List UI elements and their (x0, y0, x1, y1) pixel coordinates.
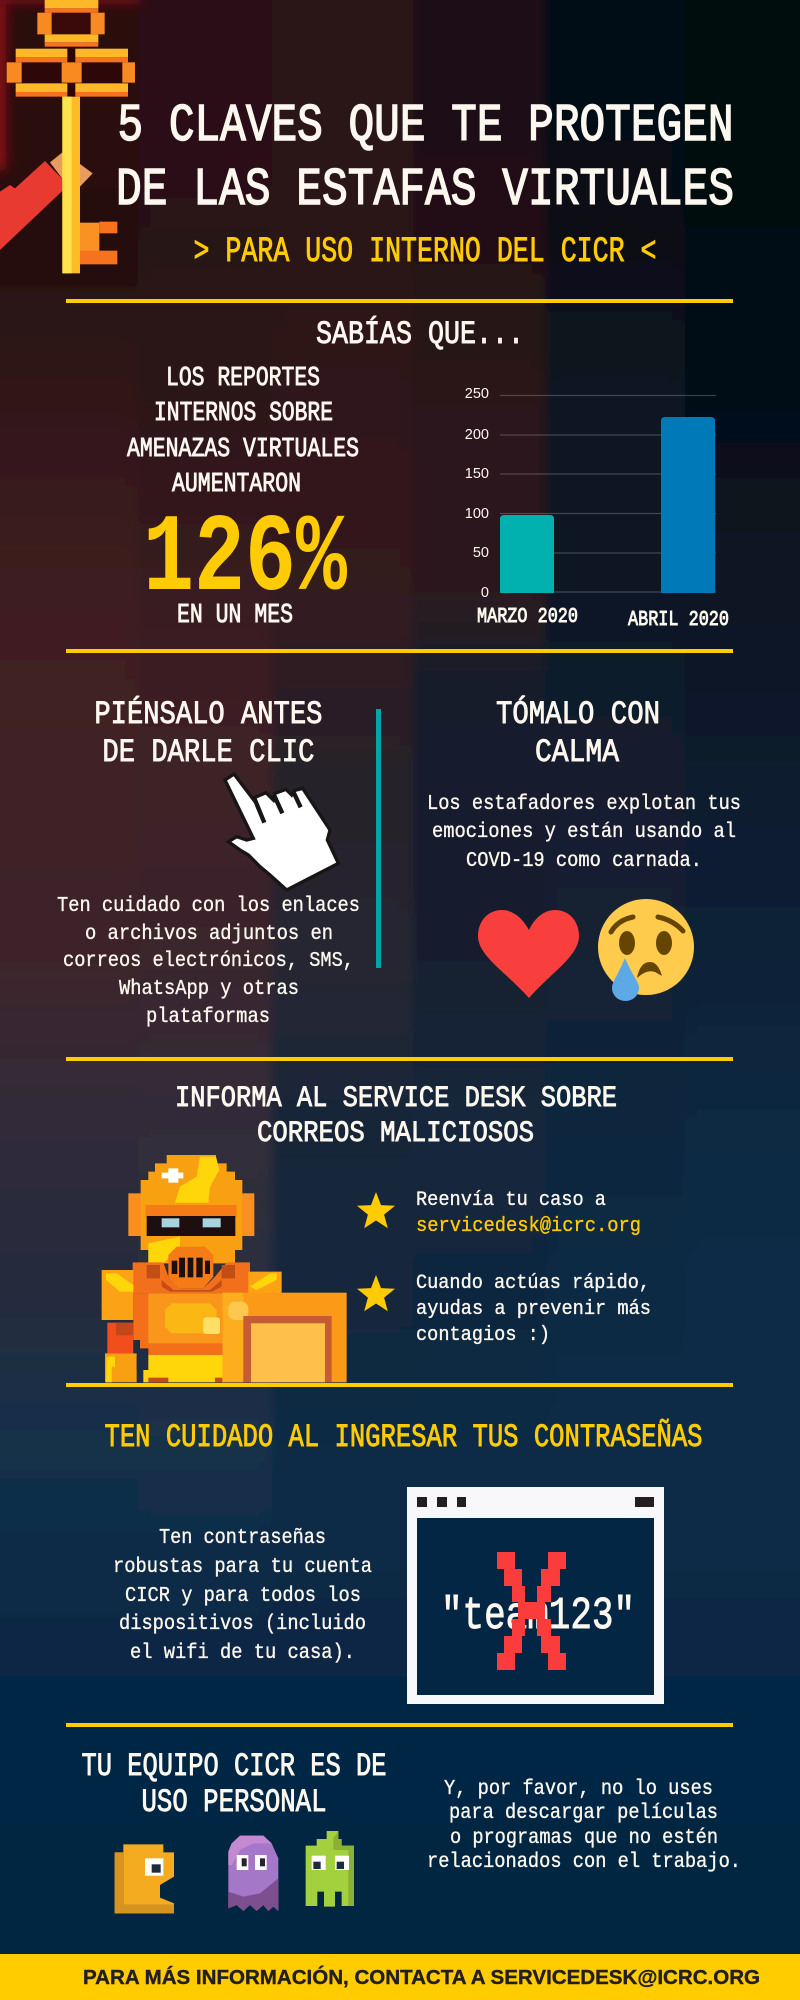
body text (427, 793, 741, 873)
key shaft (62, 97, 80, 273)
illustration: browser window with crossed password: "team123" (441, 1591, 635, 1642)
body text: plataformas (146, 1006, 270, 1029)
footer bar: PARA MÁS INFORMACIÓN, CONTACTA A SERVICEDESK@ICRC.ORG (83, 1965, 760, 1989)
list item: actúa rápido: Cuando actúas rápido, (416, 1272, 650, 1295)
body text: Y, por favor, no lo uses (444, 1778, 713, 1801)
subtitle: > PARA USO INTERNO DEL CICR < (194, 232, 656, 272)
title (116, 96, 734, 220)
body text: relacionados con el trabajo. (427, 1851, 741, 1874)
heading: INFORMA AL SERVICE DESK SOBRE (175, 1082, 617, 1116)
icon: hand holding golden key (0, 0, 135, 273)
body text: dispositivos (incluido (119, 1613, 366, 1636)
icon: heart (478, 910, 579, 998)
body text: o archivos adjuntos en (85, 923, 333, 946)
heading: DE DARLE CLIC (102, 734, 314, 771)
heading: TÓMALO CON (496, 696, 660, 733)
statistic text (127, 364, 359, 500)
body text: Ten cuidado con los enlaces (57, 895, 360, 918)
heading (496, 696, 660, 771)
bar chart: 0 (481, 585, 489, 601)
body text: CICR y para todos los (125, 1585, 361, 1608)
heading (94, 696, 322, 771)
body text (427, 1778, 741, 1874)
footer bar (0, 1954, 800, 2000)
bar chart: MARZO 2020 (477, 606, 578, 629)
panel: equipo de uso personal (82, 1748, 741, 1913)
icon: pointer hand (225, 774, 338, 890)
hand (50, 152, 93, 188)
list item: actúa rápido (357, 1272, 651, 1347)
panel: informa al service desk (102, 1082, 651, 1382)
bar chart: 250 (465, 386, 489, 402)
heading: CALMA (535, 734, 620, 771)
bar chart: ABRIL 2020 (628, 609, 729, 632)
heading (82, 1748, 386, 1821)
icon: star (357, 1275, 395, 1311)
bar chart: 100 (465, 506, 489, 522)
panel: sabías que (127, 316, 729, 632)
list item: reenvía: servicedesk@icrc.org (416, 1215, 641, 1238)
body text: el wifi de tu casa). (130, 1642, 355, 1665)
body text (113, 1527, 372, 1665)
heading: SABÍAS QUE... (316, 316, 524, 353)
heading (175, 1082, 617, 1151)
key head (7, 0, 135, 97)
list item: actúa rápido: contagios :) (416, 1324, 550, 1347)
body text: correos electrónicos, SMS, (63, 950, 354, 973)
body text: WhatsApp y otras (119, 978, 299, 1001)
body text: emociones y están usando al (432, 821, 736, 844)
body text: o programas que no estén (450, 1827, 718, 1850)
body text: para descargar películas (449, 1802, 718, 1825)
panel: piénsalo antes de darle clic (57, 696, 360, 1029)
illustration: browser window with crossed password (407, 1487, 664, 1704)
body text: robustas para tu cuenta (113, 1556, 372, 1579)
bar chart: 50 (473, 545, 489, 561)
heading: USO PERSONAL (142, 1784, 326, 1821)
list item: reenvía (357, 1189, 641, 1238)
icon: star (357, 1192, 395, 1228)
panel: contraseñas (104, 1419, 702, 1704)
statistic text: AMENAZAS VIRTUALES (127, 435, 359, 465)
statistic text: INTERNOS SOBRE (154, 399, 333, 429)
heading: PIÉNSALO ANTES (94, 696, 322, 733)
statistic text: LOS REPORTES (166, 364, 320, 394)
panel: tómalo con calma (427, 696, 741, 1001)
arm (0, 161, 63, 250)
list item: reenvía: Reenvía tu caso a (416, 1189, 606, 1212)
bar chart: 200 (465, 427, 489, 443)
body text: Ten contraseñas (159, 1527, 326, 1550)
bar chart: 150 (465, 466, 489, 482)
statistic text: AUMENTARON (172, 470, 301, 500)
heading: TU EQUIPO CICR ES DE (82, 1748, 386, 1785)
list item: actúa rápido: ayudas a prevenir más (416, 1298, 651, 1321)
big number: 126% (143, 498, 348, 623)
key teeth (80, 222, 117, 264)
icon: crying face (598, 899, 694, 1001)
illustration: pixel robot with shield (102, 1155, 347, 1382)
heading: CORREOS MALICIOSOS (257, 1117, 534, 1151)
bar chart (465, 386, 729, 632)
body text: Los estafadores explotan tus (427, 793, 741, 816)
body text: COVD-19 como carnada. (466, 850, 702, 873)
caption: EN UN MES (177, 601, 293, 631)
illustration: arcade characters (115, 1831, 354, 1913)
body text (57, 895, 360, 1029)
